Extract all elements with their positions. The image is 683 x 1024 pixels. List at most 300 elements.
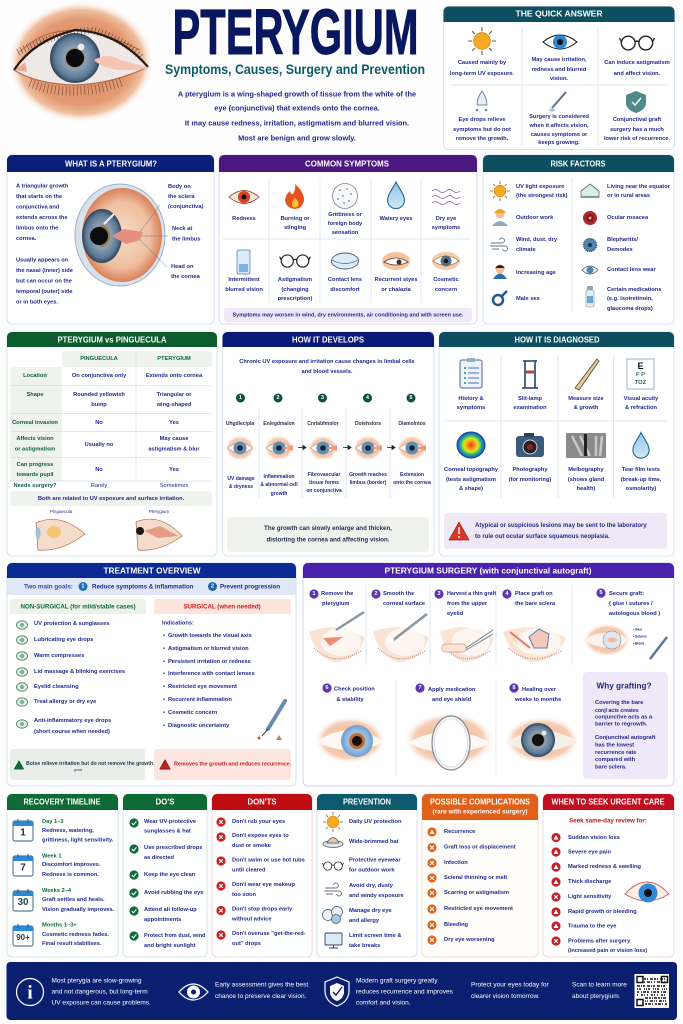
callout: why grafting bbox=[583, 672, 668, 779]
panel: the quick answer bbox=[444, 6, 674, 150]
symptom labels: Recurrent styes bbox=[374, 277, 418, 283]
panel: when to seek urgent care bbox=[543, 794, 674, 957]
labels: anatomy: the limbus bbox=[172, 236, 200, 242]
callout: growth enlarges: distorting the cornea and affecting vision. bbox=[266, 536, 390, 544]
symptom labels bbox=[225, 212, 460, 302]
text: scan to learn more: Scan to learn more bbox=[572, 982, 627, 988]
icon: camera bbox=[516, 433, 544, 457]
icon: corneal topography bbox=[456, 432, 486, 458]
quick answer texts: Surgery is considered bbox=[529, 114, 589, 120]
subheading: Seek same-day review for: bbox=[569, 818, 647, 824]
heading: PTERYGIUM vs PINGUECULA bbox=[58, 336, 167, 344]
stage captions: Fibrovascular bbox=[308, 472, 340, 478]
warning icons bbox=[427, 827, 437, 945]
check icons bbox=[129, 818, 139, 941]
diagnosis labels: (for monitoring) bbox=[509, 477, 551, 483]
column: surgical: Growth towards the visual axis bbox=[168, 633, 252, 639]
timeline text: Months 1–3+ bbox=[42, 922, 77, 928]
timeline text: Discomfort improves. bbox=[42, 862, 101, 868]
quick answer texts: lower risk of recurrence. bbox=[604, 136, 670, 142]
callout: both relieve: growt bbox=[74, 768, 82, 772]
diagnosis labels: (tests astigmatism bbox=[446, 477, 496, 483]
step 4 illustration bbox=[503, 627, 566, 662]
column: non-surgical: UV protection & sunglasses bbox=[34, 621, 110, 627]
stage captions: UV damage bbox=[227, 476, 255, 482]
symptom labels: or chalazia bbox=[381, 287, 412, 293]
symptom labels: Redness bbox=[232, 216, 256, 222]
QR code bbox=[634, 974, 669, 1008]
comparison table: May cause bbox=[160, 436, 188, 442]
do's text: Wear UV-protective bbox=[144, 819, 196, 825]
intro text: A pterygium is a wing-shaped growth of tissue from the white of the bbox=[178, 90, 416, 98]
don'ts text: Don't stop drops early bbox=[232, 906, 293, 912]
text: slow-growing: and not dangerous, but long-term bbox=[52, 988, 148, 996]
callout: why grafting: Covering the bare bbox=[595, 700, 643, 706]
do's text: Use prescribed drops bbox=[144, 845, 202, 851]
risk labels: Contact lens wear bbox=[607, 267, 656, 273]
icon: sun bbox=[323, 812, 343, 832]
quick answer texts: symptoms but do not bbox=[453, 127, 511, 133]
callout: both relieve: Botse relieve irritation but do not remove the growth. bbox=[26, 761, 155, 767]
comparison table: or astigmatism bbox=[15, 446, 55, 452]
quick answer texts: Eye drops relieve bbox=[458, 117, 506, 123]
stage captions: & dryness bbox=[229, 484, 253, 490]
subtitle: Symptoms, Causes, Surgery and Prevention bbox=[165, 61, 425, 77]
prevention text: for outdoor work bbox=[349, 868, 395, 874]
heading: WHEN TO SEEK URGENT CARE bbox=[552, 798, 665, 806]
heading: RISK FACTORS bbox=[550, 160, 606, 168]
quick answer texts: vision. bbox=[550, 76, 568, 82]
stage captions: tissue forms bbox=[309, 480, 339, 486]
stage captions: Extension bbox=[400, 472, 424, 478]
diagnosis labels: Visual acuity bbox=[624, 396, 659, 402]
eye cross-section illustration bbox=[75, 184, 168, 286]
icon: glasses bbox=[280, 255, 310, 267]
illustration: pinguecula eye: Pinguecula bbox=[50, 509, 73, 514]
column: surgical: Astigmatism or blurred vision bbox=[168, 646, 249, 652]
callout: atypical lesions bbox=[444, 513, 667, 549]
timeline text: Final result stabilises. bbox=[42, 941, 102, 947]
quick answer texts: and affect vision. bbox=[614, 71, 661, 77]
panel: pterygium vs pinguecula bbox=[7, 332, 217, 556]
risk labels: Blepharitis/ bbox=[607, 237, 638, 243]
do's text: and bright sunlight bbox=[144, 943, 196, 949]
callout: removes the growth bbox=[154, 749, 292, 780]
text block: description: A triangular growth bbox=[16, 184, 69, 190]
icon: shield bbox=[325, 977, 349, 1006]
stage names: Cnrlabfmolor bbox=[307, 421, 339, 427]
panel: don'ts bbox=[212, 794, 312, 957]
callout: atypical lesions: to rule out ocular surface squamous neoplasia. bbox=[475, 534, 610, 540]
step 1 illustration bbox=[309, 612, 365, 662]
callout: why grafting: Conjunctival autograft bbox=[595, 735, 655, 741]
illustration: pterygium eye: Pterygium bbox=[149, 509, 169, 514]
prevention text: and allergy bbox=[349, 918, 380, 924]
heading: TREATMENT OVERVIEW bbox=[104, 566, 201, 576]
symptom labels: blurred vision bbox=[225, 287, 263, 293]
callout: why grafting: bare sclera. bbox=[595, 764, 627, 770]
symptom labels: symptoms bbox=[432, 225, 460, 231]
hero eye illustration bbox=[8, 1, 154, 123]
step labels: Check position bbox=[334, 686, 375, 692]
step labels bbox=[321, 591, 660, 703]
icon: eye chart: F P bbox=[636, 372, 645, 378]
comparison table: No bbox=[95, 420, 103, 426]
step labels: autologous blood ) bbox=[609, 611, 660, 617]
icon: dry eye waves bbox=[432, 190, 460, 204]
icon: flame bbox=[285, 184, 304, 209]
callout: atypical lesions: Atypical or suspicious lesions may be sent to the laboratory bbox=[475, 523, 647, 529]
icon: shield bbox=[626, 91, 646, 113]
intro text: Most are benign and grow slowly. bbox=[238, 134, 356, 142]
step 5 illustration: • Blood bbox=[633, 642, 644, 646]
don'ts text: Don't swim or use hot tubs bbox=[232, 858, 305, 864]
diagnosis labels: (shows gland bbox=[568, 477, 605, 483]
risk labels: (the strongest risk) bbox=[516, 193, 568, 199]
two main goals band: Two main goals: bbox=[24, 584, 73, 590]
don'ts text bbox=[231, 819, 306, 947]
symptom labels: stinging bbox=[284, 225, 307, 231]
timeline text: Day 1–3 bbox=[42, 819, 64, 825]
complications text: Recurrence bbox=[444, 829, 475, 835]
do's text: Attend all follow-up bbox=[144, 907, 197, 913]
step labels: Apply medication bbox=[428, 687, 476, 693]
symptom labels: (changing bbox=[281, 287, 309, 293]
risk labels: Certain medications bbox=[607, 287, 661, 293]
do's text: Protect from dust, wind bbox=[144, 933, 205, 939]
icon: eyewear bbox=[322, 862, 344, 870]
comparison table: Usually no bbox=[85, 442, 114, 448]
calendar icons: 1 bbox=[20, 828, 26, 838]
step labels: and eye shield bbox=[432, 697, 472, 703]
step 5 illustration bbox=[583, 623, 667, 659]
text: slow-growing: Most pterygia are slow-growing bbox=[52, 978, 142, 984]
icon: surgical instrument bbox=[258, 701, 285, 740]
step 6 illustration bbox=[314, 716, 386, 764]
arrows between stages bbox=[298, 446, 395, 450]
timeline text: Redness is common. bbox=[42, 872, 99, 878]
stage eye illustrations bbox=[225, 435, 427, 461]
urgent care text: Light sensitivity bbox=[568, 894, 612, 900]
timeline text: Vision gradually improves. bbox=[42, 907, 115, 913]
heading: PTERYGIUM SURGERY (with conjunctival autograft) bbox=[384, 566, 592, 576]
callout: why grafting: has the lowest bbox=[595, 742, 634, 748]
callout: removes the growth: Removes the growth and reduces recurrence. bbox=[174, 762, 292, 768]
icon: red eye bbox=[625, 882, 669, 902]
heading: POSSIBLE COMPLICATIONS bbox=[430, 798, 530, 806]
column: surgical: Recurrent inflammation bbox=[168, 697, 232, 703]
icon: eye chart bbox=[627, 359, 654, 389]
intro text: It may cause redness, irritation, astigmatism and blurred vision. bbox=[185, 118, 409, 128]
do's text bbox=[144, 819, 205, 949]
icon: cosmetic eye bbox=[432, 252, 460, 270]
icon: ruler bbox=[575, 359, 599, 390]
urgent care text: (increased pain or vision loss) bbox=[568, 948, 647, 954]
text: modern graft surgery: comfort and vision. bbox=[356, 1000, 411, 1006]
step labels: Place graft on bbox=[515, 591, 553, 597]
text block: description: conjunctiva and bbox=[16, 204, 60, 210]
comparison table: towards pupil bbox=[17, 472, 54, 478]
complications text: Scarring or astigmatism bbox=[444, 890, 509, 896]
text: protect your eyes bbox=[471, 982, 550, 1000]
column: surgical: • bbox=[163, 646, 165, 652]
quick answer texts: redness and blurred bbox=[532, 67, 587, 73]
two main goals band: Prevent progression bbox=[220, 584, 280, 590]
callout: both relieve bbox=[10, 749, 155, 780]
quick answer texts: May cause irritation, bbox=[532, 57, 587, 63]
column: non-surgical: (short course when needed) bbox=[34, 729, 110, 735]
column: surgical: • bbox=[163, 710, 165, 716]
two main goals band: Reduce symptoms & inflammation bbox=[92, 584, 194, 590]
column: non-surgical: Anti-inflammatory eye drops bbox=[34, 718, 111, 724]
prevention text: Limit screen time & bbox=[349, 933, 401, 939]
step labels: from the upper bbox=[447, 601, 488, 607]
step 5 illustration: • Glue bbox=[633, 628, 642, 632]
diagnosis labels: Slit-lamp bbox=[518, 396, 543, 402]
stage numbers: 1 bbox=[239, 395, 242, 401]
diagnosis labels: Tear film tests bbox=[622, 467, 660, 473]
callout: why grafting: barrier to regrowth. bbox=[595, 722, 648, 728]
symptom labels: foreign body bbox=[328, 221, 363, 227]
do's text: as directed bbox=[144, 855, 175, 861]
quick answer texts bbox=[450, 57, 670, 146]
column: surgical: • bbox=[163, 697, 165, 703]
complications text: Infection bbox=[444, 860, 468, 866]
risk labels: Male sex bbox=[516, 296, 541, 302]
icon: medication bottle bbox=[586, 286, 594, 307]
column: surgical: • bbox=[163, 671, 165, 677]
symptom labels: sensation bbox=[332, 230, 359, 236]
column: surgical: • bbox=[163, 633, 165, 639]
urgent care text: Severe eye pain bbox=[568, 850, 612, 856]
text: modern graft surgery: Modern graft surgery greatly bbox=[356, 978, 438, 984]
comparison table: Sometimes bbox=[160, 483, 188, 489]
diagnosis labels: History & bbox=[458, 396, 484, 402]
don'ts text: until cleared bbox=[232, 868, 266, 874]
risk labels: Wind, dust, dry bbox=[516, 237, 558, 243]
callout: why grafting: conjunctive acts as a bbox=[595, 714, 653, 720]
step 8 illustration bbox=[504, 716, 580, 764]
icon: meibography image bbox=[566, 433, 606, 458]
text block: description: but can occur on the bbox=[16, 278, 72, 284]
timeline text: Cosmetic redness fades. bbox=[42, 932, 109, 938]
comparison table: No bbox=[95, 467, 103, 473]
do's text: Avoid rubbing the eye bbox=[144, 890, 204, 896]
quick answer texts: Can induce astigmatism bbox=[604, 60, 670, 66]
column: non-surgical: Treat allergy or dry eye bbox=[34, 699, 96, 705]
icon: male symbol bbox=[493, 291, 507, 305]
panel: common symptoms bbox=[219, 155, 477, 324]
labels: anatomy: the cornea bbox=[171, 274, 201, 280]
complications text: Bleeding bbox=[444, 922, 469, 928]
text block: description: Usually appears on bbox=[16, 258, 69, 264]
step numbers: 2 bbox=[374, 591, 378, 597]
symptom labels: Astigmatism bbox=[278, 277, 312, 283]
comparison table: Needs surgery? bbox=[14, 483, 57, 489]
column: non-surgical: Eyelid cleansing bbox=[34, 684, 79, 690]
comparison table: On conjunctiva only bbox=[72, 373, 127, 379]
text: early assessment: chance to preserve clear vision. bbox=[215, 993, 307, 1000]
text: modern graft surgery: reduces recurrence and improves bbox=[356, 988, 454, 996]
prevention text: Manage dry eye bbox=[349, 908, 392, 914]
icon: surgical instrument bbox=[549, 92, 566, 112]
callout: both related: Both are related to UV exposure and surface irritation. bbox=[38, 496, 185, 502]
icon: grit circle bbox=[332, 184, 358, 208]
quick answer texts: causes symptoms or bbox=[531, 132, 588, 138]
stage captions bbox=[227, 472, 431, 497]
step numbers: 5 bbox=[599, 590, 603, 596]
symptom labels: concern bbox=[435, 287, 458, 293]
panel: treatment overview bbox=[7, 563, 296, 786]
warning icons bbox=[551, 833, 561, 946]
step labels: Remove the bbox=[321, 591, 353, 597]
timeline text: Week 1 bbox=[42, 854, 62, 860]
column: surgical: Persistent irritation or redness bbox=[168, 659, 251, 665]
two main goals band: 1 bbox=[81, 584, 85, 590]
urgent care text: Rapid growth or bleeding bbox=[568, 909, 637, 915]
diagnosis labels: & shape) bbox=[459, 486, 483, 492]
cross icons bbox=[216, 817, 226, 940]
symptom labels: Burning or bbox=[280, 216, 310, 222]
comparison table: wing-shaped bbox=[156, 402, 192, 408]
risk labels: Demodex bbox=[607, 247, 633, 253]
callout: why grafting: compared with bbox=[595, 757, 636, 763]
diagnosis labels: symptoms bbox=[457, 405, 485, 411]
timeline text: Weeks 2–4 bbox=[42, 888, 72, 894]
footer banner bbox=[6, 962, 677, 1020]
complications text: Scleral thinning or melt bbox=[444, 875, 507, 881]
panel: possible complications bbox=[422, 794, 538, 957]
calendar icons: 90+ bbox=[16, 933, 30, 942]
step numbers: 4 bbox=[505, 591, 509, 597]
column: non-surgical: Lid massage & blinking exercises bbox=[34, 669, 125, 675]
stage numbers bbox=[236, 394, 416, 402]
step numbers bbox=[309, 588, 606, 693]
stage captions: onto the cornea bbox=[393, 480, 431, 486]
heading: PREVENTION bbox=[343, 798, 391, 806]
panel: risk factors bbox=[483, 155, 674, 324]
text block: description: limbus onto the bbox=[16, 226, 58, 232]
labels: anatomy: (conjunctiva) bbox=[168, 204, 203, 210]
icon: sun bbox=[490, 181, 510, 201]
heading: the quick answer: THE QUICK ANSWER bbox=[516, 10, 603, 18]
icon: info bbox=[16, 978, 44, 1006]
text: slow-growing: UV exposure can cause problems. bbox=[52, 1000, 151, 1006]
comparison table: Can progress bbox=[17, 462, 53, 468]
text: scan to learn more: about pterygium. bbox=[572, 993, 621, 1000]
timeline text: grittiness, light sensitivity. bbox=[42, 838, 114, 844]
risk labels: Living near the equator bbox=[607, 184, 671, 190]
comparison table: Yes bbox=[169, 420, 179, 426]
panel: recovery timeline bbox=[7, 794, 118, 957]
column: non-surgical bbox=[10, 599, 146, 735]
quick answer texts: long-term UV exposure. bbox=[450, 71, 514, 77]
icon: red eye bbox=[229, 190, 259, 204]
comparison table: Yes bbox=[169, 467, 179, 473]
text block: description: cornea. bbox=[16, 236, 37, 242]
illustration: pinguecula eye bbox=[36, 509, 85, 550]
callout: symptoms may worsen: Symptoms may worsen in wind, dry environments, air conditioning and with screen use. bbox=[232, 312, 464, 318]
text block: description: extends across the bbox=[16, 215, 68, 221]
diagnosis labels: Corneal topography bbox=[444, 467, 499, 473]
diagnosis labels: (break-up time, bbox=[621, 477, 662, 483]
panel: prevention bbox=[317, 794, 417, 957]
complications text: Graft loss or displacement bbox=[444, 844, 516, 850]
text block: description: that starts on the bbox=[16, 194, 62, 200]
don'ts text: Don't wear eye makeup bbox=[232, 882, 296, 888]
heading: DON'TS bbox=[248, 798, 277, 806]
step labels: the bare sclera bbox=[515, 601, 556, 607]
column: surgical: SURGICAL (when needed) bbox=[183, 604, 261, 610]
quick answer texts: remove the growth. bbox=[456, 136, 509, 142]
step labels: Harvest a thin graft bbox=[447, 591, 496, 597]
do's text: appointments bbox=[144, 917, 181, 923]
text: early assessment bbox=[215, 982, 308, 1000]
diagnosis labels: & growth bbox=[574, 405, 599, 411]
risk labels bbox=[516, 184, 671, 312]
don'ts text: Don't overuse "get-the-red- bbox=[232, 931, 306, 937]
text block: description: or in both eyes. bbox=[16, 300, 58, 306]
stage names: Uhgdlecipla bbox=[226, 421, 254, 427]
risk labels: (e.g. isotretinoin, bbox=[607, 296, 653, 302]
comparison table: astigmatism & blur bbox=[148, 446, 200, 452]
step numbers: 7 bbox=[418, 685, 422, 691]
icon: allergy eye cloud bbox=[322, 906, 342, 924]
do's text: sunglasses & hat bbox=[144, 828, 191, 834]
icon: rosacea bbox=[583, 211, 597, 225]
diagnosis labels: osmolarity) bbox=[626, 486, 656, 492]
symptom labels: Grittiness or bbox=[328, 212, 363, 218]
risk labels: Ocular rosacea bbox=[607, 215, 649, 221]
prevention text: Wide-brimmed hat bbox=[349, 839, 399, 845]
prevention text: Avoid dry, dusty bbox=[349, 883, 394, 889]
intro text: and blood vessels. bbox=[302, 369, 353, 375]
step labels: weeks to months bbox=[514, 697, 561, 703]
comparison table bbox=[10, 351, 212, 489]
text: modern graft surgery bbox=[356, 978, 454, 1006]
stage numbers: 3 bbox=[321, 395, 324, 401]
panel: how it is diagnosed bbox=[439, 332, 674, 556]
icon: hat bbox=[323, 838, 343, 848]
diagnosis labels bbox=[444, 396, 662, 492]
illustration: pterygium eye bbox=[136, 509, 182, 550]
don'ts text: without advice bbox=[231, 916, 272, 922]
diagnosis labels: Measure size bbox=[568, 396, 604, 402]
don'ts text: Don't rub your eyes bbox=[232, 819, 285, 825]
icon: demodex bbox=[584, 238, 596, 252]
timeline text: Graft settles and heals. bbox=[42, 897, 105, 903]
heading bbox=[430, 798, 530, 816]
step 7 illustration bbox=[403, 712, 495, 770]
step labels: Smooth the bbox=[383, 591, 414, 597]
complications text: Restricted eye movement bbox=[444, 906, 513, 912]
step 3 illustration bbox=[440, 627, 494, 662]
icon: slit lamp bbox=[522, 360, 538, 388]
stage captions: limbus (border) bbox=[350, 480, 387, 486]
step 2 illustration bbox=[373, 614, 429, 662]
icon: eye drops bottle bbox=[476, 91, 487, 111]
icon: eye bbox=[179, 984, 208, 1000]
complications text: Dry eye worsening bbox=[444, 937, 495, 943]
labels: anatomy bbox=[168, 184, 203, 280]
stage captions: Growth reaches bbox=[349, 472, 387, 478]
symptom labels: Intermittent bbox=[228, 277, 260, 283]
step labels: Secure graft: bbox=[609, 591, 644, 597]
panel: pterygium surgery bbox=[303, 563, 674, 786]
text block: description bbox=[16, 184, 73, 306]
step labels: corneal surface bbox=[383, 601, 425, 607]
icon: vision chart bbox=[237, 250, 250, 274]
